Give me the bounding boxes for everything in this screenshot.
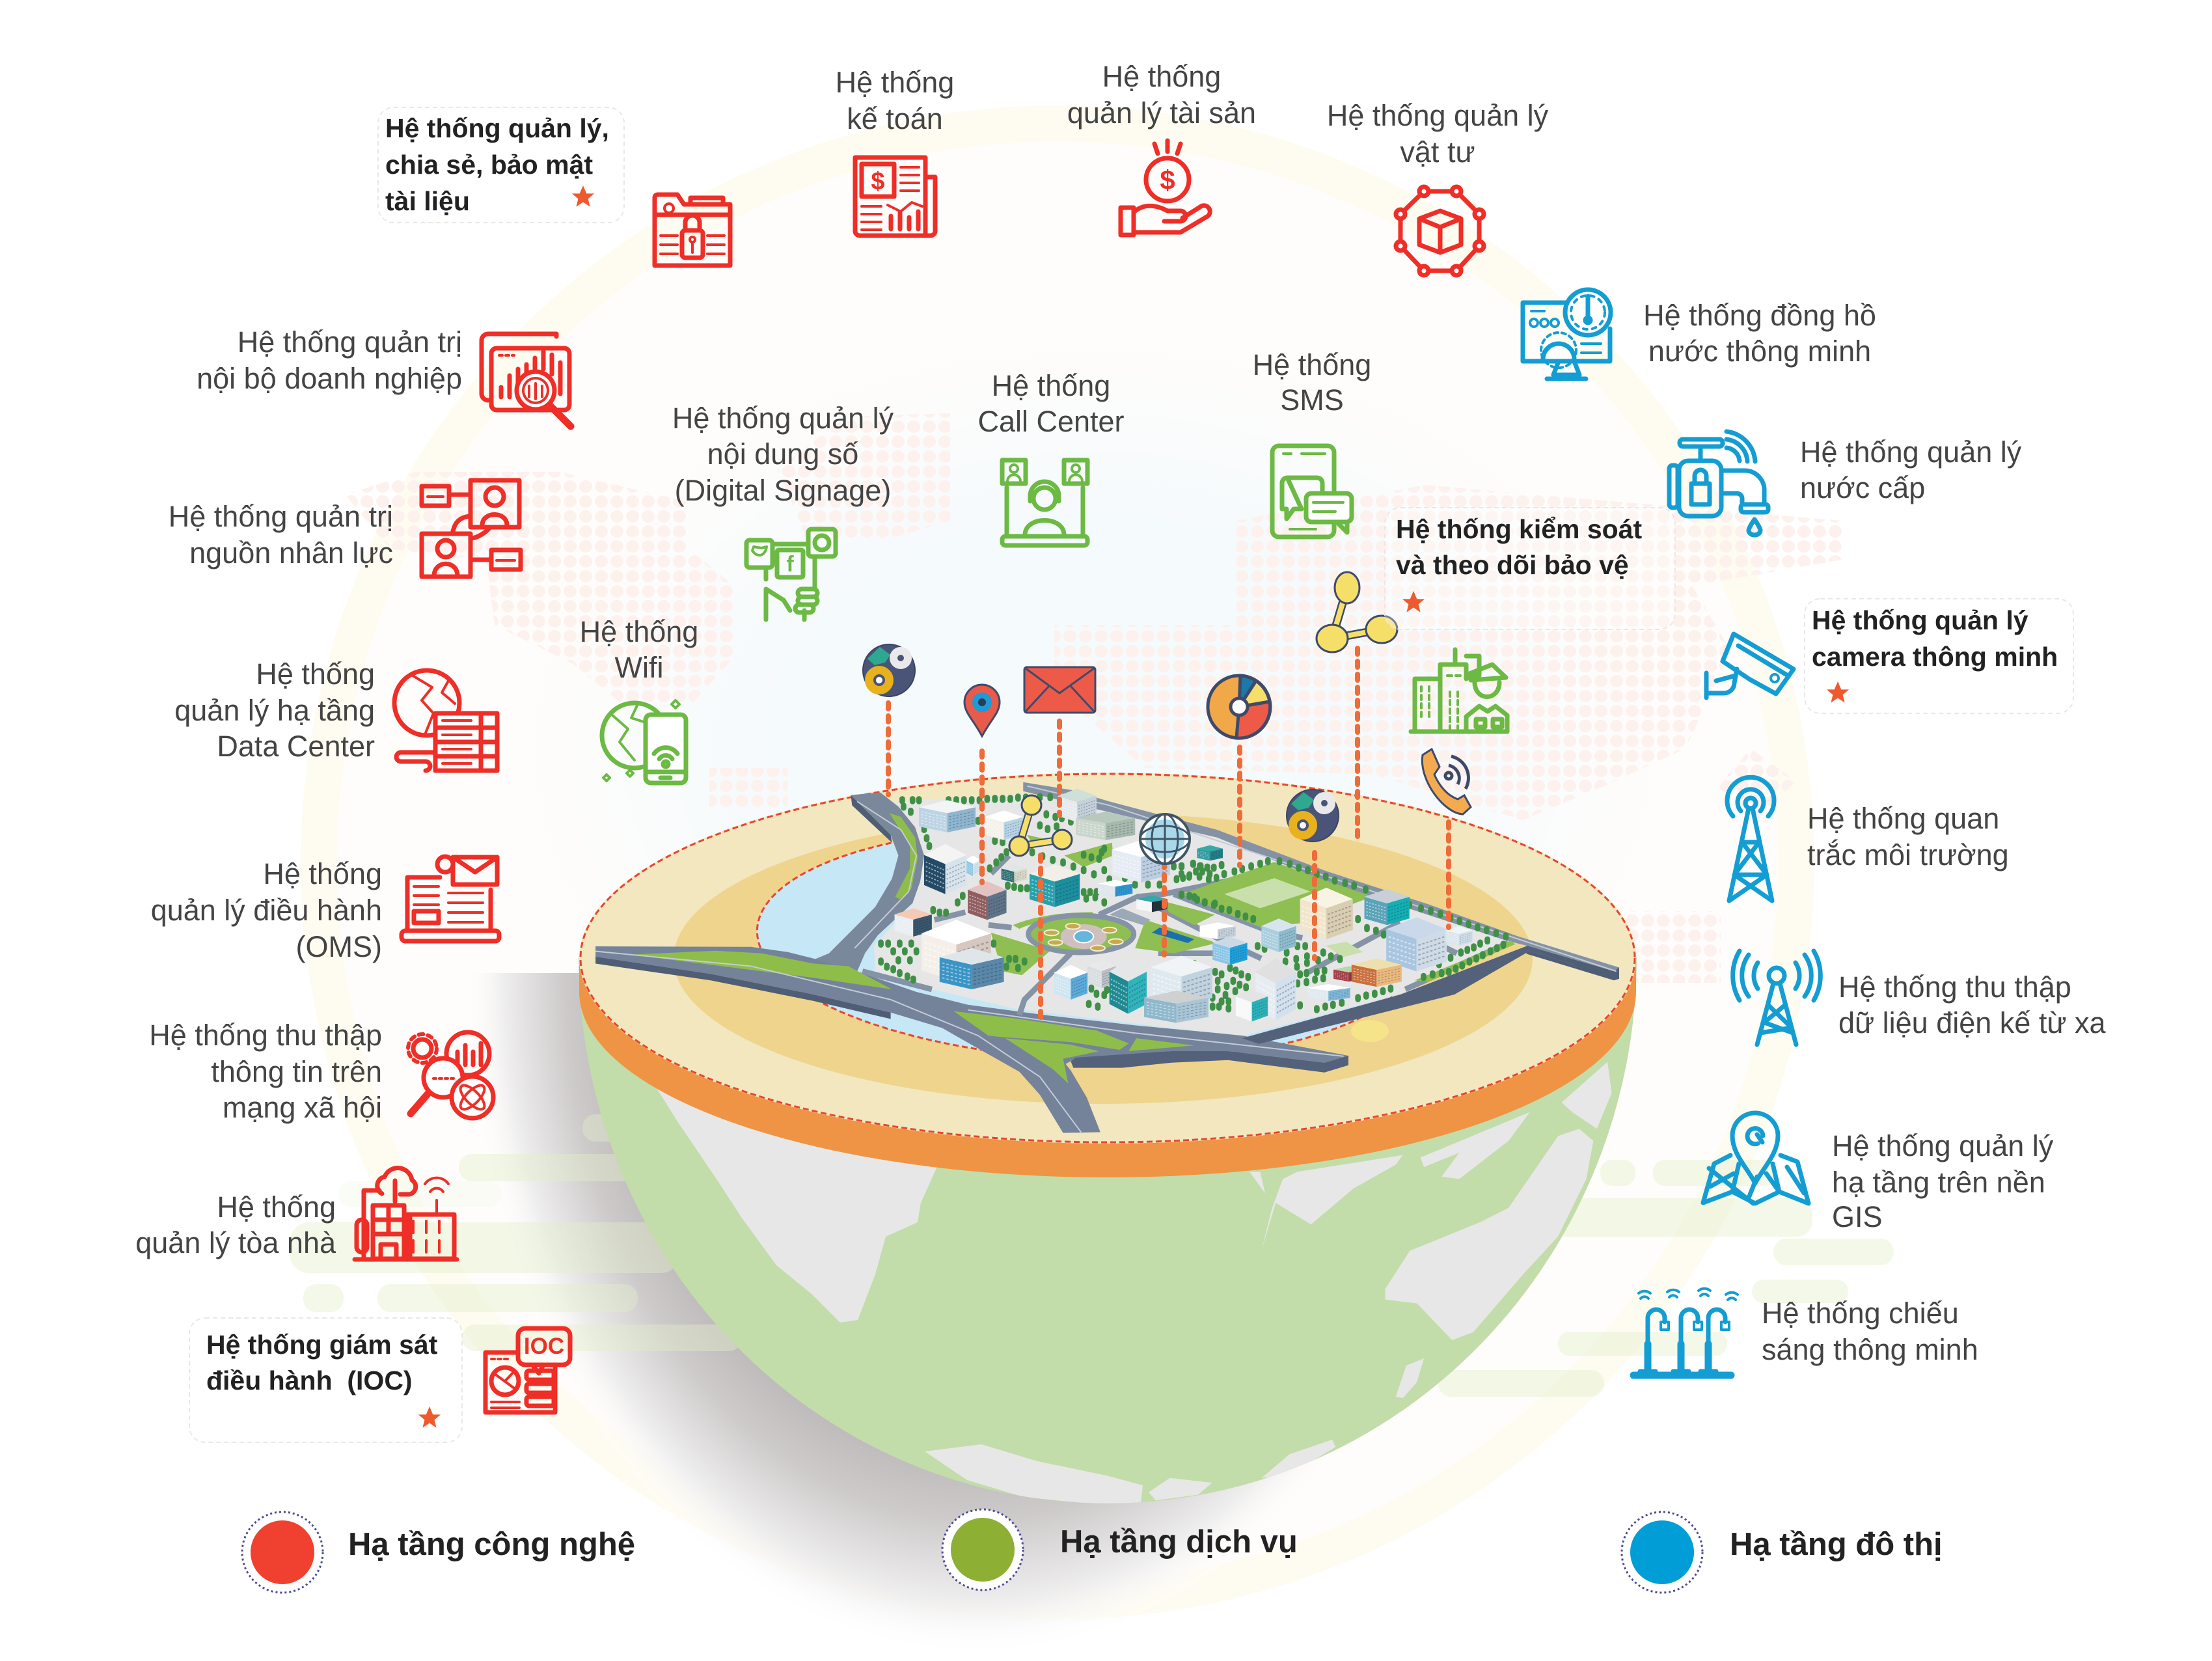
label: digital signage: nội dung số — [707, 437, 858, 471]
share icon in city — [1009, 795, 1072, 856]
gear sphere icon lower — [1287, 789, 1339, 842]
icon: GIS map — [1703, 1113, 1809, 1203]
callout: IOC: điều hành (IOC) — [206, 1366, 413, 1395]
globe shadow — [449, 973, 1562, 1661]
main west road — [595, 946, 1348, 1133]
callout: tài liệu: Hệ thống quản lý, — [385, 113, 609, 143]
icon: environment tower — [1727, 777, 1774, 901]
label: quan trắc: Hệ thống quan — [1807, 802, 1999, 835]
label: nguồn nhân lực: Hệ thống quản trị — [169, 500, 393, 533]
callout: camera: Hệ thống quản lý — [1812, 605, 2028, 635]
pale centre glow — [508, 332, 1679, 1165]
label: GIS: hạ tầng trên nền — [1832, 1166, 2045, 1199]
network globe icon — [1140, 814, 1190, 864]
icon: data center — [394, 670, 497, 771]
icon: folder lock — [655, 195, 730, 266]
legend: đô thị: Hạ tầng đô thị — [1730, 1527, 1943, 1562]
dotted world map — [345, 413, 1842, 983]
label: SMS: SMS — [1280, 383, 1344, 417]
lawns — [991, 835, 1515, 982]
upper right road — [1023, 782, 1619, 979]
callout: kiểm soát bảo vệ: và theo dõi bảo vệ — [1396, 550, 1629, 580]
upper left road face — [851, 795, 892, 843]
dashed connector lines — [888, 648, 1449, 1017]
icon: social analysis — [408, 1032, 493, 1118]
upper left road — [813, 793, 924, 971]
clouds — [290, 1114, 1894, 1397]
label: đồng hồ nước: nước thông minh — [1648, 335, 1871, 368]
icon: security camera — [1706, 634, 1794, 698]
disk dashed outline — [580, 774, 1635, 1142]
location pin icon — [964, 685, 1000, 736]
legend: công nghệ — [242, 1512, 635, 1593]
disk rim — [579, 958, 1636, 1177]
label: mạng xã hội: thông tin trên — [211, 1055, 382, 1088]
icon: wifi phone globe — [602, 700, 686, 783]
label: mạng xã hội: Hệ thống thu thập — [149, 1019, 382, 1052]
icon: human resources — [422, 480, 521, 577]
icon: IOC monitor: IOC — [524, 1334, 564, 1359]
icon: accounting report — [855, 158, 935, 236]
label: quản trị doanh nghiệp: nội bộ doanh nghiệp — [197, 362, 462, 395]
label: đồng hồ nước: Hệ thống đồng hồ — [1643, 299, 1876, 332]
callout: kiểm soát bảo vệ: Hệ thống kiểm soát — [1396, 514, 1643, 544]
road medians — [631, 813, 1194, 1083]
phone icon — [1422, 749, 1471, 814]
lane lines — [595, 786, 1617, 1132]
label: tòa nhà: quản lý tòa nhà — [135, 1226, 336, 1259]
label: điện kế: dữ liệu điện kế từ xa — [1838, 1006, 2106, 1039]
disk top — [579, 773, 1636, 1144]
label: quản lý tài sản: Hệ thống — [1102, 60, 1221, 93]
city ground — [874, 794, 1514, 1036]
label: điện kế: Hệ thống thu thập — [1838, 970, 2071, 1004]
icon: analytics window — [482, 334, 571, 426]
icon: operations laptop — [402, 857, 499, 941]
share icon upper — [1317, 572, 1397, 652]
icon: meter tower — [1733, 951, 1820, 1045]
plaza — [1028, 916, 1134, 953]
label: mạng xã hội: mạng xã hội — [223, 1091, 382, 1124]
isometric city — [595, 782, 1619, 1133]
label: wifi: Wifi — [615, 651, 663, 684]
legend: dịch vụ: Hạ tầng dịch vụ — [1060, 1524, 1298, 1559]
south east embankment — [1242, 946, 1575, 1044]
label: OMS: quản lý điều hành — [151, 894, 382, 927]
legend: đô thị — [1622, 1512, 1943, 1593]
label: kế toán: kế toán — [847, 102, 943, 135]
blue roof hall — [1152, 927, 1194, 943]
callout: tài liệu: chia sẻ, bảo mật — [385, 150, 593, 180]
label: digital signage: Hệ thống quản lý — [672, 402, 894, 435]
label: OMS: (OMS) — [296, 930, 382, 963]
icon: box network — [1396, 187, 1484, 275]
icon: digital signage hand — [746, 529, 836, 620]
yellow marker dot — [1351, 1020, 1389, 1042]
trees east — [1177, 860, 1506, 1010]
label: nước cấp: nước cấp — [1800, 471, 1925, 504]
label: GIS: Hệ thống quản lý — [1832, 1129, 2054, 1162]
envelope icon — [1024, 667, 1095, 713]
buildings east — [1197, 845, 1473, 1021]
icon: hand holding coin — [1121, 141, 1210, 235]
icon: call center — [1002, 460, 1087, 545]
icon: accounting report: $ — [871, 168, 885, 195]
callout: tài liệu — [378, 107, 624, 223]
icon: IOC monitor — [485, 1328, 570, 1412]
callout: kiểm soát bảo vệ — [1385, 508, 1675, 629]
label: tòa nhà: Hệ thống — [217, 1190, 336, 1224]
icon: digital signage hand: f — [786, 552, 794, 577]
label: vật tư: vật tư — [1400, 135, 1475, 169]
label: quản trị doanh nghiệp: Hệ thống quản trị — [238, 325, 462, 359]
label: data center: quản lý hạ tầng — [174, 694, 375, 727]
sports fields — [1224, 878, 1363, 957]
globe landmasses — [603, 989, 1612, 1509]
label: chiếu sáng: Hệ thống chiếu — [1762, 1297, 1959, 1330]
label: vật tư: Hệ thống quản lý — [1327, 99, 1549, 132]
east arm dark face — [1071, 1051, 1348, 1073]
label: nguồn nhân lực: nguồn nhân lực — [189, 536, 393, 570]
label: call center: Hệ thống — [992, 369, 1110, 402]
label: wifi: Hệ thống — [580, 615, 698, 648]
west road end face — [595, 946, 891, 1019]
label: kế toán: Hệ thống — [836, 66, 954, 99]
callout: IOC — [189, 1318, 462, 1442]
city base: ground, roads and lawns — [595, 782, 1619, 1133]
legend: dịch vụ — [942, 1509, 1298, 1590]
internal roads — [862, 855, 1509, 1015]
upper right road end face — [1527, 946, 1619, 980]
callout: camera — [1805, 599, 2073, 713]
icon: water tap — [1669, 432, 1768, 535]
globe — [579, 957, 1637, 1503]
label: call center: Call Center — [977, 405, 1125, 438]
pie chart icon — [1208, 676, 1270, 738]
icon: SMS phone — [1272, 446, 1352, 537]
legend: công nghệ: Hạ tầng công nghệ — [348, 1527, 635, 1562]
trees west — [881, 796, 1215, 1008]
label: SMS: Hệ thống — [1253, 348, 1371, 381]
icon: water meter monitor — [1523, 290, 1611, 379]
long low hall — [1110, 908, 1151, 925]
icon: smart street lights — [1633, 1289, 1738, 1375]
label: chiếu sáng: sáng thông minh — [1762, 1333, 1978, 1366]
label: digital signage: (Digital Signage) — [675, 474, 891, 507]
icon: smart building — [355, 1168, 457, 1259]
central water — [752, 814, 1419, 1074]
callout: camera: camera thông minh — [1812, 642, 2058, 672]
buildings west — [895, 789, 1212, 1023]
label: quản lý tài sản: quản lý tài sản — [1067, 96, 1256, 130]
icon: hand holding coin: $ — [1160, 165, 1175, 195]
background ring — [319, 124, 1796, 1601]
gear sphere icon — [863, 644, 915, 696]
label: OMS: Hệ thống — [263, 857, 382, 890]
label: quan trắc: trắc môi trường — [1807, 838, 2009, 872]
label: data center: Data Center — [217, 730, 375, 763]
label: GIS: GIS — [1832, 1200, 1883, 1233]
label: nước cấp: Hệ thống quản lý — [1800, 435, 2022, 469]
callout: tài liệu: tài liệu — [385, 186, 470, 216]
callout: IOC: Hệ thống giám sát — [206, 1330, 438, 1360]
icon: security officer — [1411, 650, 1507, 732]
inner sand ring — [674, 814, 1533, 1104]
label: data center: Hệ thống — [256, 657, 375, 691]
